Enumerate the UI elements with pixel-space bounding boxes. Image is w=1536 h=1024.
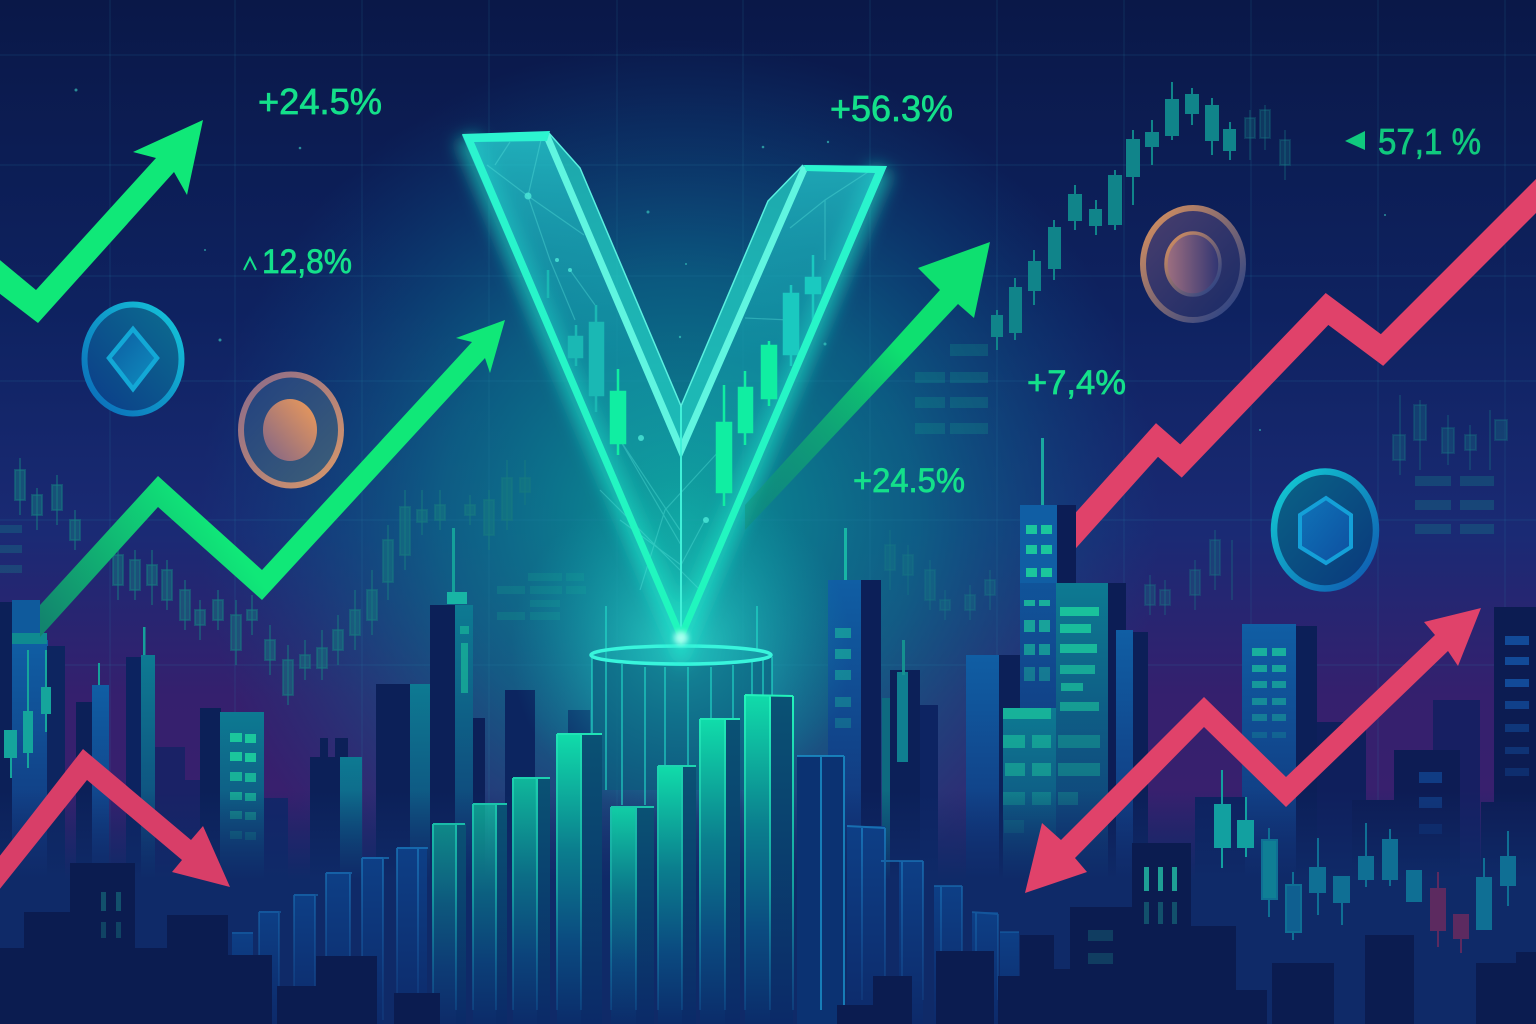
bar chart rising from pedestal — [232, 695, 1019, 1024]
foreground windows — [101, 867, 1177, 964]
label: 12,8%: 12,8% — [262, 243, 352, 281]
skyline: rear buildings — [0, 505, 1536, 1024]
blue edge bars — [232, 826, 1019, 1024]
green bars: right shaded halves — [456, 695, 793, 1024]
star particles — [74, 88, 1386, 431]
label: +24.5% top: +24.5% — [258, 81, 382, 122]
pedestal ring and columns — [591, 606, 772, 805]
candlesticks: left background — [15, 458, 530, 705]
V inner edges — [546, 134, 805, 450]
lower fog over skyline — [0, 790, 1536, 1024]
building windows — [230, 525, 1286, 840]
red candles — [1431, 872, 1468, 953]
label: +56.3%: +56.3% — [830, 88, 953, 129]
right tower blue windows — [1419, 636, 1529, 834]
arrow: centre-right green — [745, 242, 990, 530]
arrow: lower-left red — [0, 749, 230, 895]
label: +24.5% centre: +24.5% — [853, 462, 965, 500]
building group: right — [828, 505, 1536, 1024]
building group: left — [0, 528, 590, 1024]
V outer stroke — [462, 131, 887, 645]
label: +7,4%: +7,4% — [1027, 364, 1126, 402]
candlesticks: rising right series — [992, 82, 1235, 350]
candle 2 — [611, 341, 776, 506]
arrow: upper-right red — [1060, 184, 1536, 548]
candle 3 — [784, 255, 820, 366]
coin: blue diamond — [84, 304, 182, 414]
faint data blocks — [0, 344, 1494, 620]
candlesticks: lower left — [5, 650, 50, 778]
green bars: bright halves — [433, 695, 770, 1024]
base pedestal glow — [511, 480, 851, 820]
candle 1 — [548, 270, 603, 412]
V node dots — [524, 192, 709, 523]
coin: orange circle — [241, 374, 341, 486]
V centre stem — [680, 406, 682, 640]
arrow: middle green — [40, 320, 505, 637]
V glow — [466, 137, 882, 638]
right blue bar — [797, 756, 844, 1024]
V back edges — [548, 132, 803, 406]
V back faces — [545, 132, 807, 459]
bar edge lines — [433, 695, 793, 1010]
candlesticks: lower right — [1215, 770, 1515, 953]
coin: blue hexagon — [1274, 472, 1376, 588]
arrow: top-left green — [0, 120, 203, 323]
skyline: foreground silhouettes — [0, 843, 1536, 1024]
large V logo — [462, 131, 887, 645]
bright candles — [1215, 770, 1253, 868]
label: 57,1%: 57,1 % — [1378, 121, 1481, 162]
V translucent fill — [462, 132, 887, 643]
coin: copper ring — [1143, 208, 1243, 320]
V candlesticks — [548, 255, 820, 506]
V tip glare — [674, 631, 688, 645]
tower covering red arrow start — [1020, 438, 1076, 583]
dim blue candles — [1262, 823, 1515, 940]
arrow: lower-right red double-headed — [1025, 608, 1481, 893]
candlesticks: faint right series — [885, 105, 1507, 620]
neural lines inside V — [487, 140, 868, 590]
